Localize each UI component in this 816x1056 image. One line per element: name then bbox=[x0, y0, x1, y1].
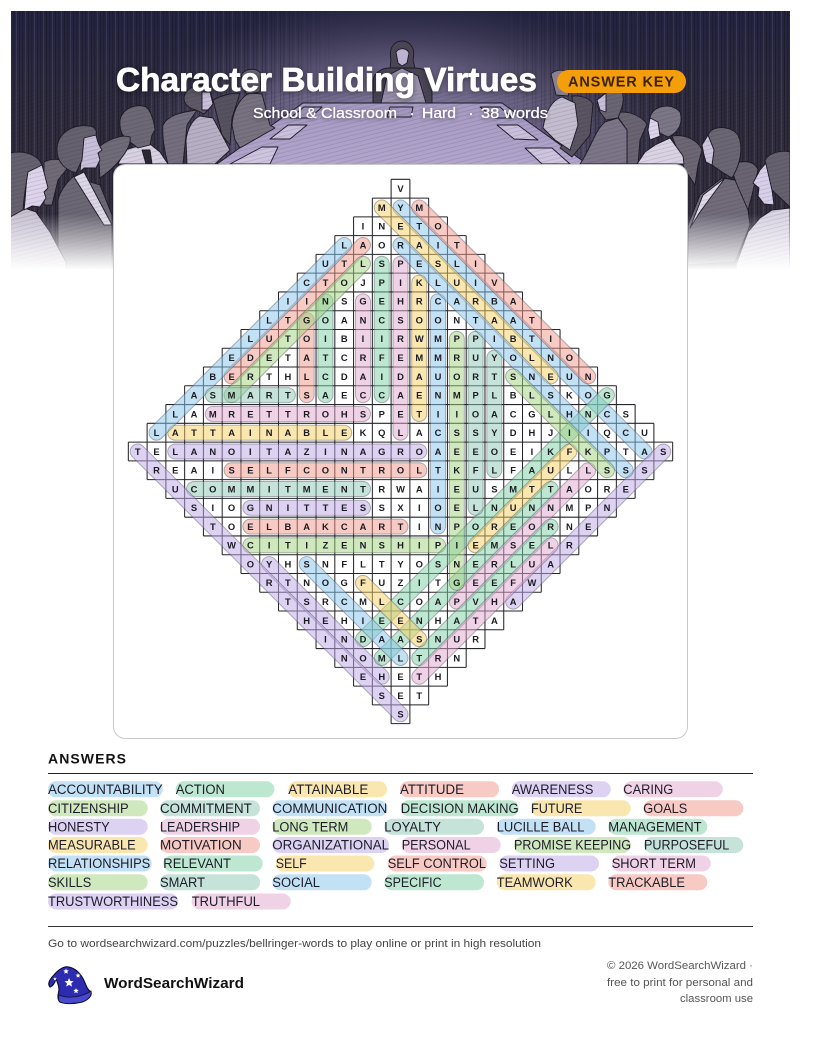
highlight: SELF bbox=[352, 572, 430, 650]
highlight: SELF CONTROL bbox=[224, 463, 427, 478]
conference table bbox=[216, 102, 582, 164]
highlight: COMMUNICATION bbox=[431, 294, 446, 534]
highlight: CITIZENSHIP bbox=[243, 538, 446, 553]
highlight: ACCOUNTABILITY bbox=[390, 197, 655, 462]
highlight: LEADERSHIP bbox=[393, 256, 408, 440]
highlight: MOTIVATION bbox=[409, 197, 599, 387]
answer word list: ATTITUDE bbox=[400, 782, 464, 797]
answer word list: MEASURABLE bbox=[48, 838, 136, 853]
answer word list: TRUTHFUL bbox=[192, 894, 260, 909]
answer word list: LEADERSHIP bbox=[160, 819, 240, 834]
highlight: SPECIFIC bbox=[374, 256, 389, 403]
subtitle: · bbox=[468, 105, 474, 122]
answer word list: HONESTY bbox=[48, 819, 110, 834]
answer word list: PROMISE KEEPING bbox=[514, 838, 631, 853]
highlight: FUTURE bbox=[465, 441, 580, 556]
answer word list: CITIZENSHIP bbox=[48, 801, 129, 816]
highlight: PERSONAL bbox=[446, 460, 599, 612]
answer word list: DECISION MAKING bbox=[401, 801, 519, 816]
highlight: SETTING bbox=[243, 500, 370, 515]
subtitle: School & Classroom bbox=[253, 105, 397, 122]
answer word list: SMART bbox=[160, 875, 205, 890]
grid letters bbox=[135, 184, 666, 720]
footer: play online link text: Go to wordsearchwizard.com/puzzles/bellringer-words to play online or print in high resolution bbox=[48, 938, 541, 950]
answer word list: MANAGEMENT bbox=[608, 819, 702, 834]
highlight: HONESTY bbox=[258, 553, 392, 687]
panel: puzzle card bbox=[114, 164, 688, 738]
subtitle: 38 words bbox=[481, 105, 548, 122]
answer word list: TRACKABLE bbox=[608, 875, 685, 890]
answer word list: SOCIAL bbox=[272, 875, 320, 890]
answer word list: SELF CONTROL bbox=[388, 856, 486, 871]
badge: answer key: ANSWER KEY bbox=[568, 75, 674, 91]
answer word list: SELF bbox=[276, 856, 307, 871]
highlight: TRACKABLE bbox=[243, 519, 408, 534]
highlight: LONG TERM bbox=[221, 253, 374, 406]
answer word list: LONG TERM bbox=[272, 819, 348, 834]
answer word list: RELATIONSHIPS bbox=[48, 856, 150, 871]
answer word list: SETTING bbox=[499, 856, 555, 871]
answer word list: PERSONAL bbox=[402, 838, 471, 853]
copyright note: classroom use bbox=[680, 993, 753, 1005]
answer word list: MOTIVATION bbox=[160, 838, 242, 853]
found word highlights bbox=[127, 197, 674, 725]
answer word list: COMMUNICATION bbox=[272, 801, 387, 816]
highlight: ACTION bbox=[318, 294, 333, 403]
answer word list: ATTAINABLE bbox=[288, 782, 368, 797]
subtitle: Hard bbox=[422, 105, 456, 122]
people: left side of the table bbox=[10, 69, 275, 272]
title: Character Building Virtues bbox=[116, 62, 537, 99]
subtitle bbox=[253, 105, 548, 122]
copyright note: © 2026 WordSearchWizard · bbox=[607, 960, 753, 972]
answer word list: LUCILLE BALL bbox=[497, 819, 585, 834]
subtitle: · bbox=[410, 105, 414, 122]
highlight: LUCILLE BALL bbox=[146, 234, 355, 443]
highlight: ORGANIZATIONAL bbox=[168, 444, 427, 459]
highlight: SHORT TERM bbox=[205, 406, 370, 421]
header illustration: boardroom meeting bbox=[10, 0, 790, 272]
answer word list: RELEVANT bbox=[163, 856, 231, 871]
answer word list: SHORT TERM bbox=[612, 856, 696, 871]
highlight: LOYALTY bbox=[487, 350, 502, 478]
highlight: SKILLS bbox=[503, 366, 618, 481]
highlight: MANAGEMENT bbox=[371, 478, 561, 669]
answer word list: COMMITMENT bbox=[160, 801, 252, 816]
badge: answer key bbox=[557, 70, 686, 93]
highlight: SMART bbox=[205, 388, 295, 403]
highlight: RELEVANT bbox=[409, 516, 561, 669]
highlight: COMMITMENT bbox=[187, 482, 370, 497]
highlight: PROMISE KEEPING bbox=[449, 331, 464, 590]
highlight: AWARENESS bbox=[502, 441, 674, 612]
icon: wizard hat bbox=[49, 967, 91, 1004]
answer word list: CARING bbox=[623, 782, 673, 797]
highlight: ATTAINABLE bbox=[168, 425, 352, 440]
copyright note: free to print for personal and bbox=[607, 977, 753, 989]
highlight: GOALS bbox=[299, 313, 314, 403]
answer word list: ORGANIZATIONAL bbox=[272, 838, 389, 853]
highlight: RELATIONSHIPS bbox=[390, 234, 636, 481]
word search grid bbox=[127, 179, 674, 725]
highlight: MEASURABLE bbox=[371, 197, 561, 387]
answer word list: ACTION bbox=[176, 782, 225, 797]
answer word list: FUTURE bbox=[531, 801, 582, 816]
highlight: TEAMWORK bbox=[412, 275, 427, 421]
highlight: ATTITUDE bbox=[221, 234, 374, 387]
highlight: TRUSTWORTHINESS bbox=[127, 441, 411, 725]
highlight: SOCIAL bbox=[296, 553, 411, 669]
answer word list: TRUSTWORTHINESS bbox=[48, 894, 178, 909]
highlight: DECISION MAKING bbox=[352, 385, 618, 650]
answer word list: TEAMWORK bbox=[497, 875, 573, 890]
answer word list: SKILLS bbox=[48, 875, 91, 890]
highlight: PURPOSEFUL bbox=[468, 331, 483, 515]
heading: answers: ANSWERS bbox=[48, 750, 126, 766]
copyright note bbox=[607, 960, 753, 1005]
people: right side of the table bbox=[543, 70, 790, 272]
answer word list: AWARENESS bbox=[512, 782, 593, 797]
highlight: TRUTHFUL bbox=[409, 535, 561, 687]
answer word list: LOYALTY bbox=[384, 819, 441, 834]
answer word list: ACCOUNTABILITY bbox=[48, 782, 163, 797]
answer word list: SPECIFIC bbox=[384, 875, 442, 890]
person: head of the table bbox=[373, 41, 432, 103]
answer word list: GOALS bbox=[643, 801, 687, 816]
highlight: CARING bbox=[355, 294, 370, 403]
wordmark: WordSearchWizard bbox=[104, 975, 244, 992]
answer word list: PURPOSEFUL bbox=[644, 838, 730, 853]
answer word list bbox=[48, 781, 743, 910]
